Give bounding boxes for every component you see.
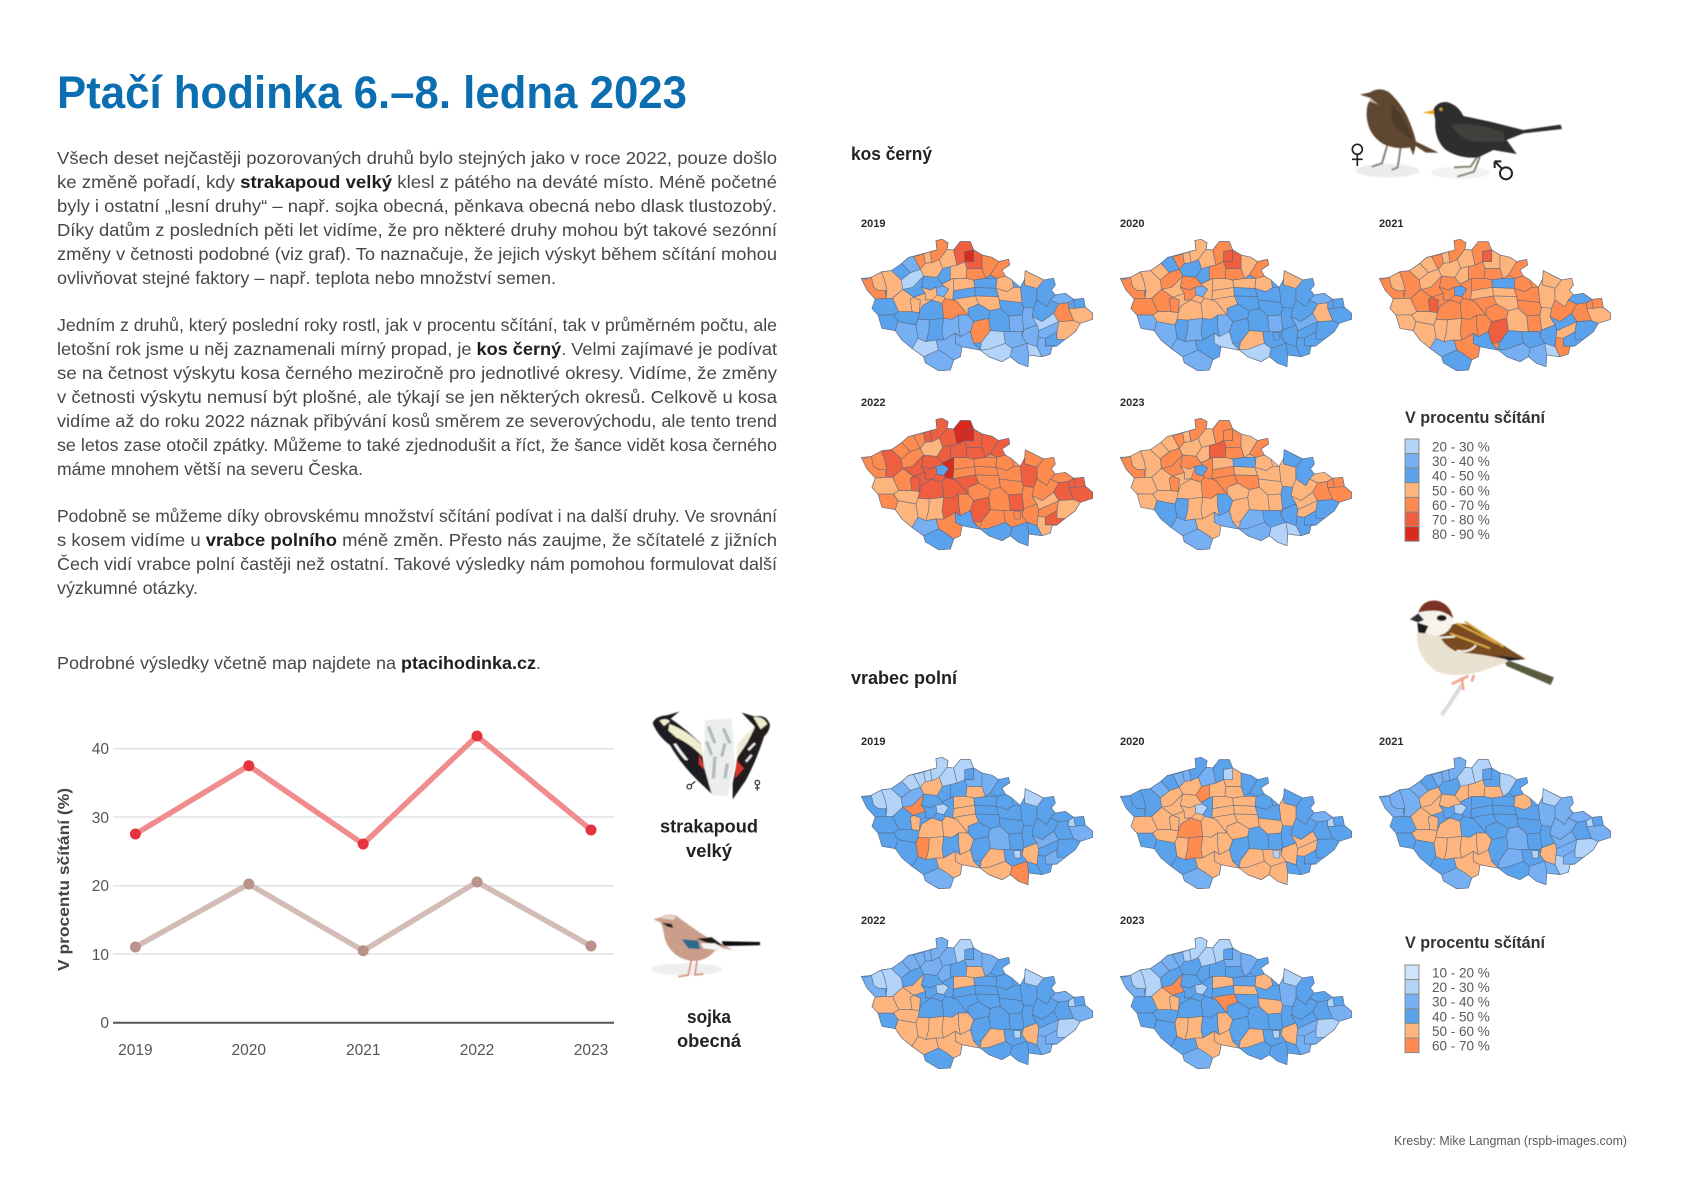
- heading: kos černý: kos černý: [851, 144, 932, 164]
- x axis labels: 2022: [460, 1042, 494, 1059]
- text block: paragraph 1: změny v četnosti podobné (viz graf). To naznačuje, že jejich výskyt během sčítání mohou: [57, 244, 777, 264]
- y axis labels: 10: [92, 947, 109, 964]
- legend: vrabec polní: 10 - 20 %: [1432, 966, 1490, 980]
- year labels: vrabec polní: 2019: [861, 736, 885, 748]
- y axis labels: 30: [92, 810, 109, 827]
- legend: kos černý: 70 - 80 %: [1432, 512, 1490, 528]
- map: vrabec polní 2023: [1120, 937, 1352, 1069]
- legend: kos černý: 80 - 90 %: [1432, 527, 1490, 542]
- legend: vrabec polní: [1405, 934, 1546, 1054]
- y axis labels: 40: [92, 741, 109, 758]
- legend: vrabec polní: 50 - 60 %: [1432, 1024, 1490, 1039]
- year labels: kos černý: 2022: [861, 397, 885, 409]
- icon: sojka obecná (jay): [651, 915, 760, 977]
- title: Ptačí hodinka 6.–8. ledna 2023: [57, 67, 687, 118]
- map: kos černý 2023: [1120, 418, 1352, 550]
- year labels: vrabec polní: [861, 736, 1403, 927]
- label: sojka obecná: [677, 1007, 742, 1051]
- x axis labels: 2021: [346, 1042, 380, 1059]
- year labels: vrabec polní: 2021: [1379, 736, 1403, 748]
- map: kos černý 2022: [861, 418, 1093, 550]
- text block: paragraph 1: Všech deset nejčastěji pozorovaných druhů bylo stejných jako v roce 2022, pouze došlo: [57, 148, 777, 168]
- legend: vrabec polní: 60 - 70 %: [1432, 1038, 1490, 1054]
- icon: kos černý (blackbirds): [1352, 89, 1562, 179]
- text block: paragraph 2: Jedním z druhů, který poslední roky rostl, jak v procentu sčítání, tak v průměrném počtu, ale: [57, 315, 777, 335]
- x axis labels: 2019: [118, 1042, 153, 1059]
- legend: vrabec polní: V procentu sčítání: [1405, 934, 1546, 952]
- text block: paragraph 2: letošní rok jsme u něj zaznamenali mírný propad, je kos černý. Velmi zajímavé je podívat: [57, 339, 777, 359]
- legend: kos černý: 60 - 70 %: [1432, 498, 1490, 513]
- credit: Kresby: Mike Langman (rspb-images.com): [1394, 1133, 1627, 1148]
- text block: paragraph 3: výzkumné otázky.: [57, 578, 198, 598]
- icon: strakapoud velký (woodpeckers): [653, 712, 770, 799]
- legend: vrabec polní: 30 - 40 %: [1432, 995, 1490, 1010]
- text block: paragraph 1: Díky datům z posledních pěti let vidíme, že pro některé druhy mohou být takové sezónní: [57, 220, 777, 240]
- text block: paragraph 1: [57, 148, 777, 288]
- text block: paragraph 2: se na četnost výskytu kosa černého meziročně pro jednotlivé okresy. Vidíme, že změny: [57, 363, 777, 383]
- legend: vrabec polní: 20 - 30 %: [1432, 980, 1490, 995]
- map: vrabec polní 2020: [1120, 757, 1352, 889]
- label: strakapoud velký: [660, 816, 758, 861]
- legend: kos černý: V procentu sčítání: [1405, 409, 1546, 427]
- map: kos černý 2021: [1379, 239, 1611, 371]
- y axis title: V procentu sčítání (%): [56, 788, 73, 971]
- label: sojka obecná: obecná: [677, 1031, 742, 1051]
- icon: vrabec polní (sparrow): [1410, 601, 1554, 715]
- line chart: [56, 730, 614, 1059]
- year labels: vrabec polní: 2023: [1120, 915, 1144, 927]
- legend: kos černý: [1405, 409, 1546, 542]
- map: vrabec polní 2021: [1379, 757, 1611, 889]
- label: strakapoud velký: velký: [686, 841, 732, 861]
- text block: paragraph 2: se letos zase otočil zpátky. Můžeme to také zjednodušit a říct, že šance vidět kosa černého: [57, 435, 777, 455]
- legend: kos černý: 40 - 50 %: [1432, 469, 1490, 484]
- x axis labels: 2023: [574, 1042, 608, 1059]
- text block: paragraph 3: s kosem vidíme u vrabce polního méně změn. Přesto nás zaujme, že sčítatelé z jižních: [57, 530, 777, 550]
- year labels: kos černý: [861, 218, 1403, 409]
- icon: female symbol: [1352, 144, 1363, 166]
- x axis labels: 2020: [232, 1042, 266, 1059]
- y axis labels: 20: [92, 878, 109, 895]
- text block: link to results: Podrobné výsledky včetně map najdete na ptacihodinka.cz.: [57, 653, 541, 673]
- text block: paragraph 2: [57, 315, 777, 479]
- year labels: vrabec polní: 2022: [861, 915, 885, 927]
- y axis labels: [92, 741, 109, 1032]
- year labels: kos černý: 2021: [1379, 218, 1403, 230]
- x axis labels: [118, 1042, 608, 1059]
- text block: paragraph 2: vidíme až do roku 2022 náznak přibývání kosů směrem ze severovýchodu, ale tento trend: [57, 411, 777, 431]
- map: vrabec polní 2019: [861, 757, 1093, 889]
- year labels: kos černý: 2019: [861, 218, 885, 230]
- label: sojka obecná: sojka: [687, 1007, 732, 1027]
- series: strakapoud velký: [130, 730, 596, 850]
- legend: kos černý: 30 - 40 %: [1432, 454, 1490, 469]
- label: strakapoud velký: strakapoud: [660, 816, 758, 836]
- text block: paragraph 1: ovlivňovat stejné faktory – např. teplota nebo množství semen.: [57, 268, 556, 288]
- y axis labels: 0: [100, 1015, 109, 1032]
- map: kos černý 2019: [861, 239, 1093, 371]
- text block: paragraph 3: Čech vidí vrabce polní častěji než ostatní. Takové výsledky nám pomohou formulovat další: [57, 553, 777, 574]
- year labels: kos černý: 2023: [1120, 397, 1144, 409]
- text block: paragraph 2: v četnosti výskytu nemusí být plošné, ale týkají se jen některých okresů. Celkově u kosa: [57, 387, 777, 407]
- text block: paragraph 3: [57, 506, 777, 598]
- text block: paragraph 1: ke změně pořadí, kdy strakapoud velký klesl z pátého na deváté místo. Méně početné: [57, 172, 777, 192]
- map: vrabec polní 2022: [861, 937, 1093, 1069]
- legend: kos černý: 20 - 30 %: [1432, 440, 1490, 454]
- heading: vrabec polní: vrabec polní: [851, 668, 958, 688]
- text block: paragraph 2: máme mnohem větší na severu Česka.: [57, 458, 363, 479]
- legend: vrabec polní: 40 - 50 %: [1432, 1009, 1490, 1024]
- year labels: kos černý: 2020: [1120, 218, 1144, 230]
- series: sojka obecná: [130, 876, 596, 956]
- legend: kos černý: 50 - 60 %: [1432, 483, 1490, 498]
- text block: paragraph 3: Podobně se můžeme díky obrovskému množství sčítání podívat i na další druhy. Ve srovnání: [57, 506, 777, 526]
- year labels: vrabec polní: 2020: [1120, 736, 1144, 748]
- map: kos černý 2020: [1120, 239, 1352, 371]
- icon: male symbol: [1495, 161, 1512, 179]
- text block: paragraph 1: byly i ostatní „lesní druhy“ – např. sojka obecná, pěnkava obecná nebo dlask tlustozobý.: [57, 196, 777, 216]
